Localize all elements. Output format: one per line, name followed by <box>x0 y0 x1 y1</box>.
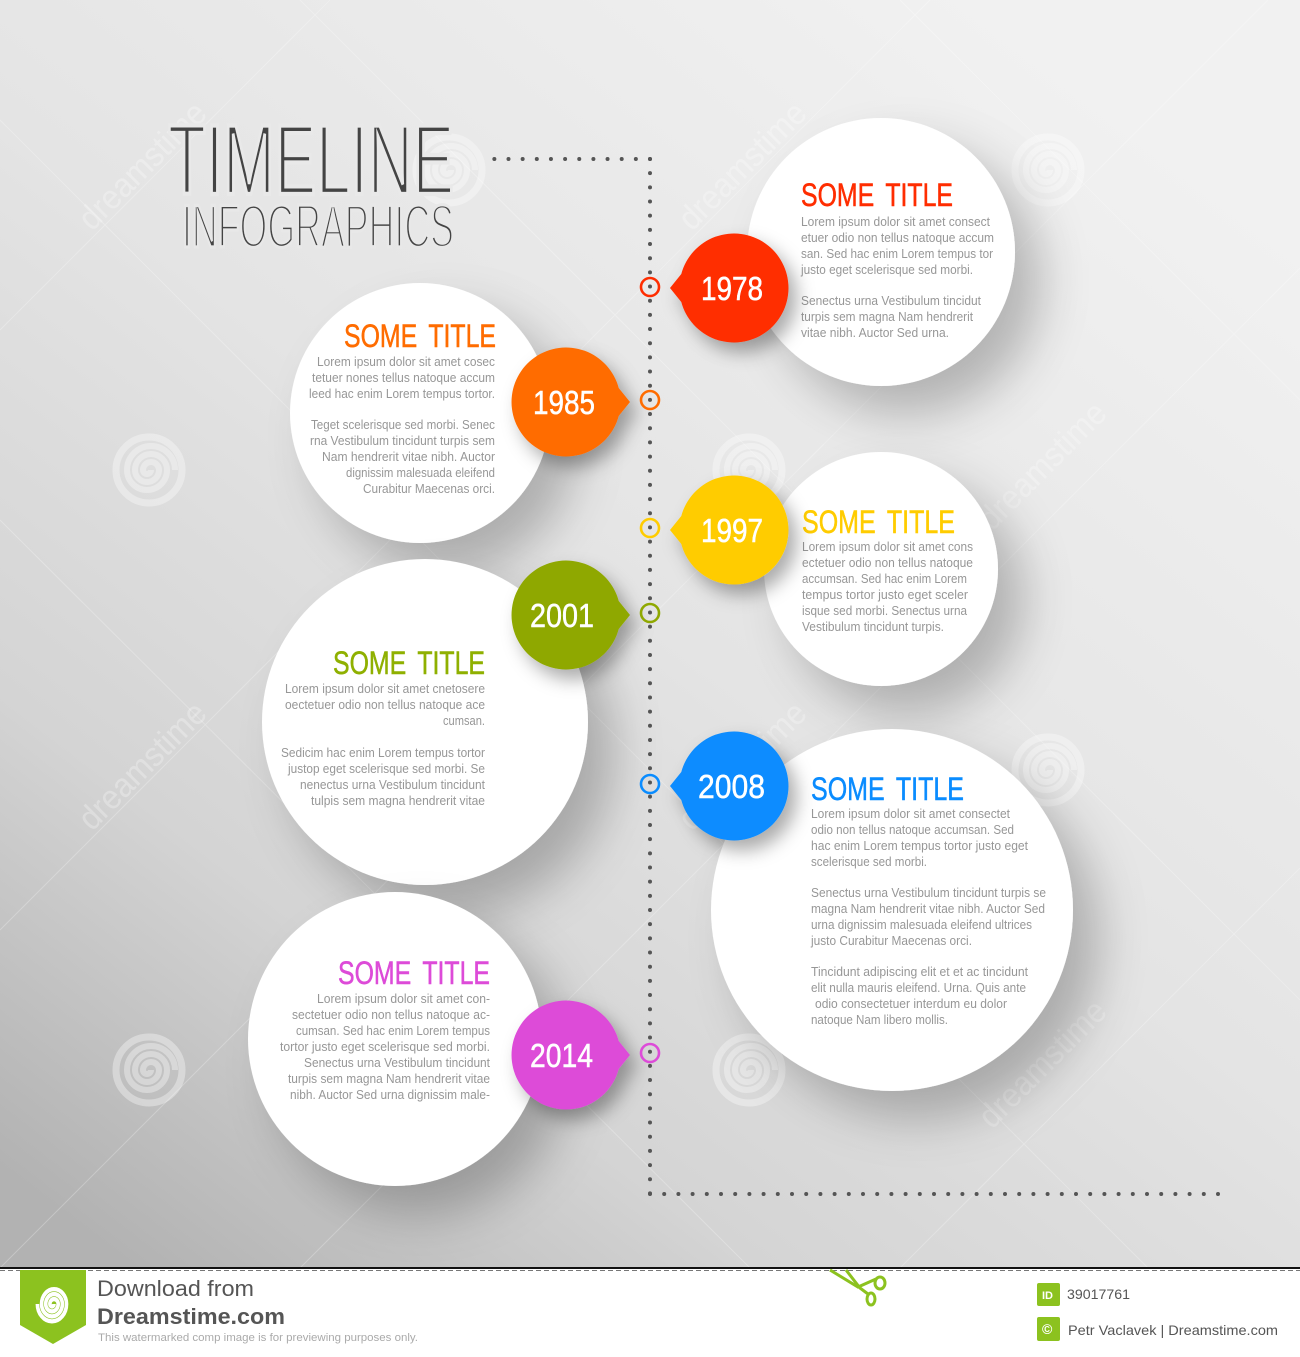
panel: 2008: Lorem ipsum dolor sit amet consectet <box>811 807 1010 821</box>
footer download text: Download from <box>97 1276 254 1301</box>
panel: 1985: tetuer nones tellus natoque accum <box>312 371 495 385</box>
badge: 2008: 2008 <box>698 768 765 805</box>
badge: 2014: 2014 <box>530 1037 593 1074</box>
panel: 2014: turpis sem magna Nam hendrerit vitae <box>288 1072 490 1086</box>
panel: 1985: Lorem ipsum dolor sit amet cosec <box>317 355 495 369</box>
panel: 1997: Vestibulum tincidunt turpis. <box>802 620 944 634</box>
badge: 1985 <box>512 347 630 456</box>
panel: 2014: nibh. Auctor Sed urna dignissim male- <box>290 1088 490 1102</box>
footer author credit: Petr Vaclavek | Dreamstime.com <box>1068 1322 1278 1338</box>
footer author credit: © <box>1042 1321 1053 1337</box>
panel: 1985: SOME TITLE <box>344 318 496 354</box>
panel: 1997: ectetuer odio non tellus natoque <box>802 556 973 570</box>
marker: 1985 <box>641 391 659 409</box>
panel: 1978 <box>747 118 1015 386</box>
footer download text: This watermarked comp image is for previewing purposes only. <box>98 1332 418 1344</box>
panel: 1985: Curabitur Maecenas orci. <box>363 482 495 496</box>
icon: scissors <box>830 1270 885 1305</box>
panel: 1978: turpis sem magna Nam hendrerit <box>801 310 973 324</box>
panel: 2014: sectetuer odio non tellus natoque ac- <box>292 1008 490 1022</box>
panel: 2008: Senectus urna Vestibulum tincidunt turpis se <box>811 886 1046 900</box>
badge: 1978 <box>670 233 788 342</box>
badge: 1997 <box>670 476 788 584</box>
badge: 2008 <box>670 732 788 840</box>
badge: 2014 <box>512 1000 630 1109</box>
panel: 2008: urna dignissim malesuada eleifend ultrices <box>811 918 1032 932</box>
dotted timeline path <box>494 159 1219 1194</box>
panel: 1997: isque sed morbi. Senectus urna <box>802 604 967 618</box>
panel: 2014: Senectus urna Vestibulum tincidunt <box>304 1056 490 1070</box>
panel: 1985: dignissim malesuada eleifend <box>346 466 495 480</box>
panel: 1985: Nam hendrerit vitae nibh. Auctor <box>322 450 495 464</box>
title: INFOGRAPHICS <box>182 193 454 260</box>
panel: 1978: SOME TITLE <box>801 177 953 213</box>
panel: 1978: Lorem ipsum dolor sit amet consect <box>801 215 990 229</box>
panel: 2008: odio non tellus natoque accumsan. Sed <box>811 823 1014 837</box>
badge: 1978: 1978 <box>701 270 763 307</box>
panel: 2014: cumsan. Sed hac enim Lorem tempus <box>296 1024 490 1038</box>
footer author credit <box>1037 1317 1278 1341</box>
marker: 2001 <box>641 604 659 622</box>
watermark: spirals and wordmarks: dreamstime <box>971 394 1114 538</box>
marker: 2014 <box>641 1044 659 1062</box>
panel: 1997: accumsan. Sed hac enim Lorem <box>802 572 967 586</box>
panel: 2008: natoque Nam libero mollis. <box>811 1013 948 1027</box>
title: TIMELINE <box>168 104 454 215</box>
panel: 1985: leed hac enim Lorem tempus tortor. <box>309 387 495 401</box>
watermark: spirals and wordmarks: dreamstime <box>671 94 814 238</box>
panel: 2001: justop eget scelerisque sed morbi. Se <box>287 762 485 776</box>
title <box>168 104 454 260</box>
panel: 2001: nenectus urna Vestibulum tincidunt <box>300 778 486 792</box>
footer download text: Dreamstime.com <box>97 1304 285 1329</box>
marker: 2008 <box>641 775 659 793</box>
panel: 2008: Tincidunt adipiscing elit et et ac tincidunt <box>811 965 1029 979</box>
panel: 1978: etuer odio non tellus natoque accum <box>801 231 994 245</box>
footer image id <box>1037 1283 1130 1306</box>
panel: 2008: justo Curabitur Maecenas orci. <box>810 934 972 948</box>
panel: 2008 <box>711 729 1073 1091</box>
panel: 1978: san. Sed hac enim Lorem tempus tor <box>801 247 993 261</box>
panel: 2001: Sedicim hac enim Lorem tempus tortor <box>281 746 485 760</box>
panel: 2008: odio consectetuer interdum eu dolor <box>815 997 1007 1011</box>
panel: 2008: scelerisque sed morbi. <box>811 855 927 869</box>
badge: 2001 <box>512 560 630 669</box>
panel: 2008: magna Nam hendrerit vitae nibh. Auctor Sed <box>811 902 1045 916</box>
footer image id: 39017761 <box>1067 1286 1130 1302</box>
panel: 2001: Lorem ipsum dolor sit amet cnetosere <box>285 682 485 696</box>
panel: 1985: Teget scelerisque sed morbi. Senec <box>311 418 495 432</box>
watermark: spirals and wordmarks <box>71 94 1114 1136</box>
panel: 2014: Lorem ipsum dolor sit amet con- <box>317 992 490 1006</box>
panel: 1997: SOME TITLE <box>802 504 955 540</box>
footer download text <box>97 1276 418 1344</box>
panel: 2008: elit nulla mauris eleifend. Urna. Quis ante <box>811 981 1026 995</box>
badge: 1985: 1985 <box>533 384 595 421</box>
watermark: spirals and wordmarks: dreamstime <box>71 94 214 238</box>
badge: 1997: 1997 <box>701 512 763 549</box>
panel: 1985 <box>290 283 550 543</box>
footer image id: ID <box>1042 1290 1053 1302</box>
badge: 2001: 2001 <box>530 597 594 634</box>
panel: 1978: justo eget scelerisque sed morbi. <box>800 263 973 277</box>
panel: 1985: rna Vestibulum tincidunt turpis sem <box>310 434 495 448</box>
panel: 2001 <box>262 559 588 885</box>
panel: 2014: SOME TITLE <box>338 955 490 991</box>
footer strip <box>0 1267 1300 1357</box>
panel: 1978: Senectus urna Vestibulum tincidut <box>801 294 981 308</box>
panel: 2001: SOME TITLE <box>333 645 485 681</box>
watermark: spirals and wordmarks: dreamstime <box>71 694 214 838</box>
panel: 2008: hac enim Lorem tempus tortor justo eget <box>811 839 1029 853</box>
panel: 1997: Lorem ipsum dolor sit amet cons <box>802 540 973 554</box>
watermark: spirals and wordmarks: dreamstime <box>971 992 1114 1136</box>
watermark: spirals and wordmarks: dreamstime <box>671 694 814 838</box>
panel: 2001: cumsan. <box>443 714 485 728</box>
marker: 1978 <box>641 278 659 296</box>
panel: 2001: tulpis sem magna hendrerit vitae <box>311 794 485 808</box>
panel: 1978: vitae nibh. Auctor Sed urna. <box>801 326 949 340</box>
icon: ribbon logo <box>20 1270 86 1344</box>
panel: 2001: oectetuer odio non tellus natoque ace <box>285 698 485 712</box>
panel: 1997: tempus tortor justo eget sceler <box>802 588 968 602</box>
marker: 1997 <box>641 519 659 537</box>
panel: 2014: tortor justo eget scelerisque sed morbi. <box>280 1040 490 1054</box>
panel: 2008: SOME TITLE <box>811 771 964 807</box>
panel: 2014 <box>248 892 542 1186</box>
panel: 1997 <box>764 452 998 686</box>
